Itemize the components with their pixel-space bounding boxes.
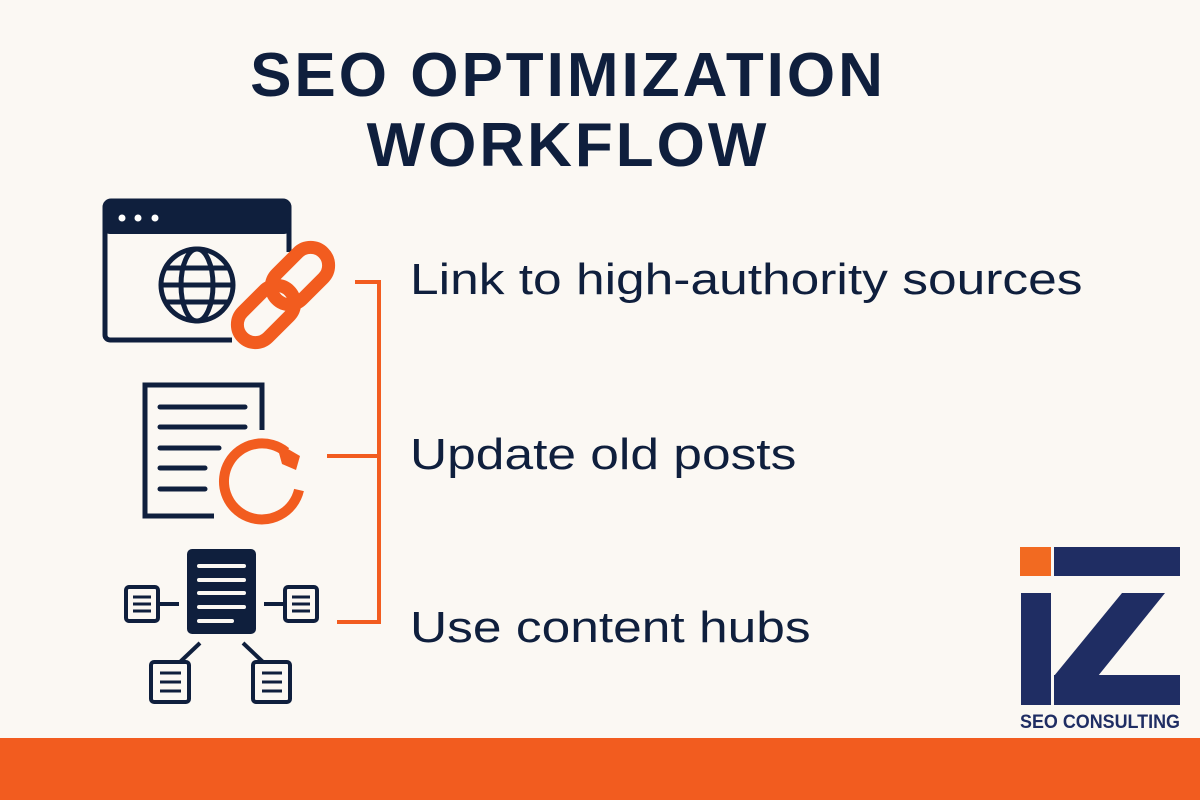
title: SEO OPTIMIZATION xyxy=(250,41,886,110)
step text: link: Link to high-authority sources xyxy=(410,255,1082,304)
step text: update: Update old posts xyxy=(410,430,796,479)
logo xyxy=(1020,547,1180,733)
icon: content hub xyxy=(126,549,317,702)
title xyxy=(250,41,886,180)
step text: hubs: Use content hubs xyxy=(410,603,811,652)
icon: document with refresh xyxy=(145,385,300,519)
bracket connector xyxy=(327,282,379,622)
icon: chain link xyxy=(230,240,336,350)
footer band xyxy=(0,738,1200,800)
logo: SEO CONSULTING xyxy=(1020,712,1180,733)
icon: browser with globe xyxy=(104,201,290,340)
title: WORKFLOW xyxy=(367,111,769,180)
